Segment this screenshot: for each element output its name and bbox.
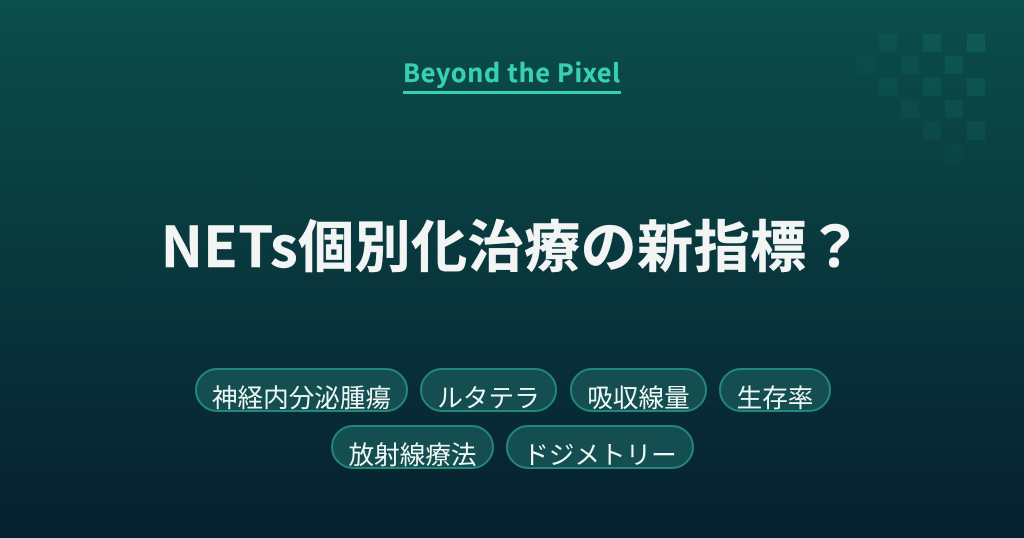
title: NETs個別化治療の新指標？: [161, 203, 863, 284]
tag: 神経内分泌腫瘍: 神経内分泌腫瘍: [212, 378, 391, 415]
tag: 生存率: 生存率: [737, 378, 813, 415]
tag: 神経内分泌腫瘍: [195, 368, 408, 412]
tag: ドジメトリー: [506, 425, 694, 469]
tag: ルタテラ: ルタテラ: [437, 378, 540, 415]
tag: ドジメトリー: ドジメトリー: [523, 435, 677, 472]
tag: 吸収線量: [570, 368, 707, 412]
brand heading: Beyond the Pixel: Beyond the Pixel: [403, 54, 621, 90]
decorative pixel grid icon: [923, 34, 985, 140]
tag: ルタテラ: [420, 368, 557, 412]
tag: 放射線療法: [331, 425, 494, 469]
tag: 放射線療法: 放射線療法: [348, 435, 476, 472]
tag: 吸収線量: 吸収線量: [587, 378, 690, 415]
tags: [195, 368, 831, 472]
tag: 生存率: [719, 368, 831, 412]
